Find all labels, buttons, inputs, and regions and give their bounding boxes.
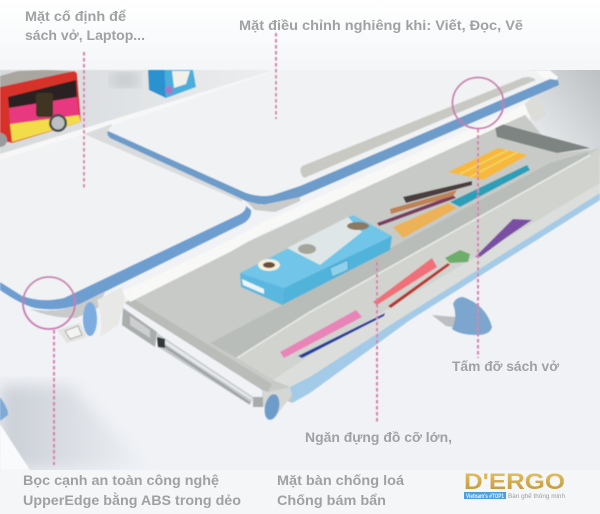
darker floor band <box>210 152 590 358</box>
left fixed tabletop <box>0 134 251 318</box>
shelf ridge <box>237 155 590 358</box>
book support strip <box>300 77 536 178</box>
side lip <box>125 298 272 393</box>
label: fixed surface line two: sách vở, Laptop... <box>25 27 145 43</box>
toy bus <box>0 70 81 147</box>
logo: Vietnam's #TOP1 <box>466 494 505 500</box>
hinge bracket <box>525 97 547 122</box>
back desk surface <box>0 70 280 158</box>
logo: Bàn ghế thông minh <box>508 491 565 500</box>
front shelf <box>237 148 600 380</box>
label: edge line one: Bọc cạnh an toàn công nghệ <box>23 472 219 488</box>
white tube <box>122 105 528 302</box>
logo <box>464 469 565 500</box>
drawer tray <box>125 115 600 403</box>
logo: D'ERGO <box>464 469 565 494</box>
desk foot <box>432 297 492 335</box>
left desk leg <box>0 397 30 470</box>
panel gap <box>84 124 244 203</box>
toy box <box>148 70 196 98</box>
highlight circles <box>23 78 504 329</box>
label: book support: Tấm đỡ sách vở <box>452 358 559 374</box>
stored pens and sticks <box>280 148 532 358</box>
label: tilt surface: Mặt điều chỉnh nghiêng khi: Viết, Đọc, Vẽ <box>239 17 523 33</box>
drawer end cap <box>262 387 292 421</box>
callout pointers <box>54 33 478 465</box>
left bracket <box>57 287 125 343</box>
front rim <box>273 183 600 387</box>
right tilting tabletop <box>107 70 559 212</box>
drawer back wall <box>495 123 590 153</box>
back surface edge <box>0 70 279 160</box>
label: edge line two: UpperEdge bằng ABS trong dẻo <box>23 491 241 508</box>
shadow behind bus <box>111 73 139 87</box>
pencil case <box>240 215 392 305</box>
label: surface line two: Chống bám bẩn <box>277 492 386 508</box>
blue front rail <box>290 193 600 403</box>
label: storage: Ngăn đựng đồ cỡ lớn, <box>305 429 452 445</box>
metal slide rail <box>122 308 263 407</box>
label: surface line one: Mặt bàn chống loá <box>277 472 404 488</box>
label: fixed surface: Mặt cố định để <box>25 8 126 24</box>
